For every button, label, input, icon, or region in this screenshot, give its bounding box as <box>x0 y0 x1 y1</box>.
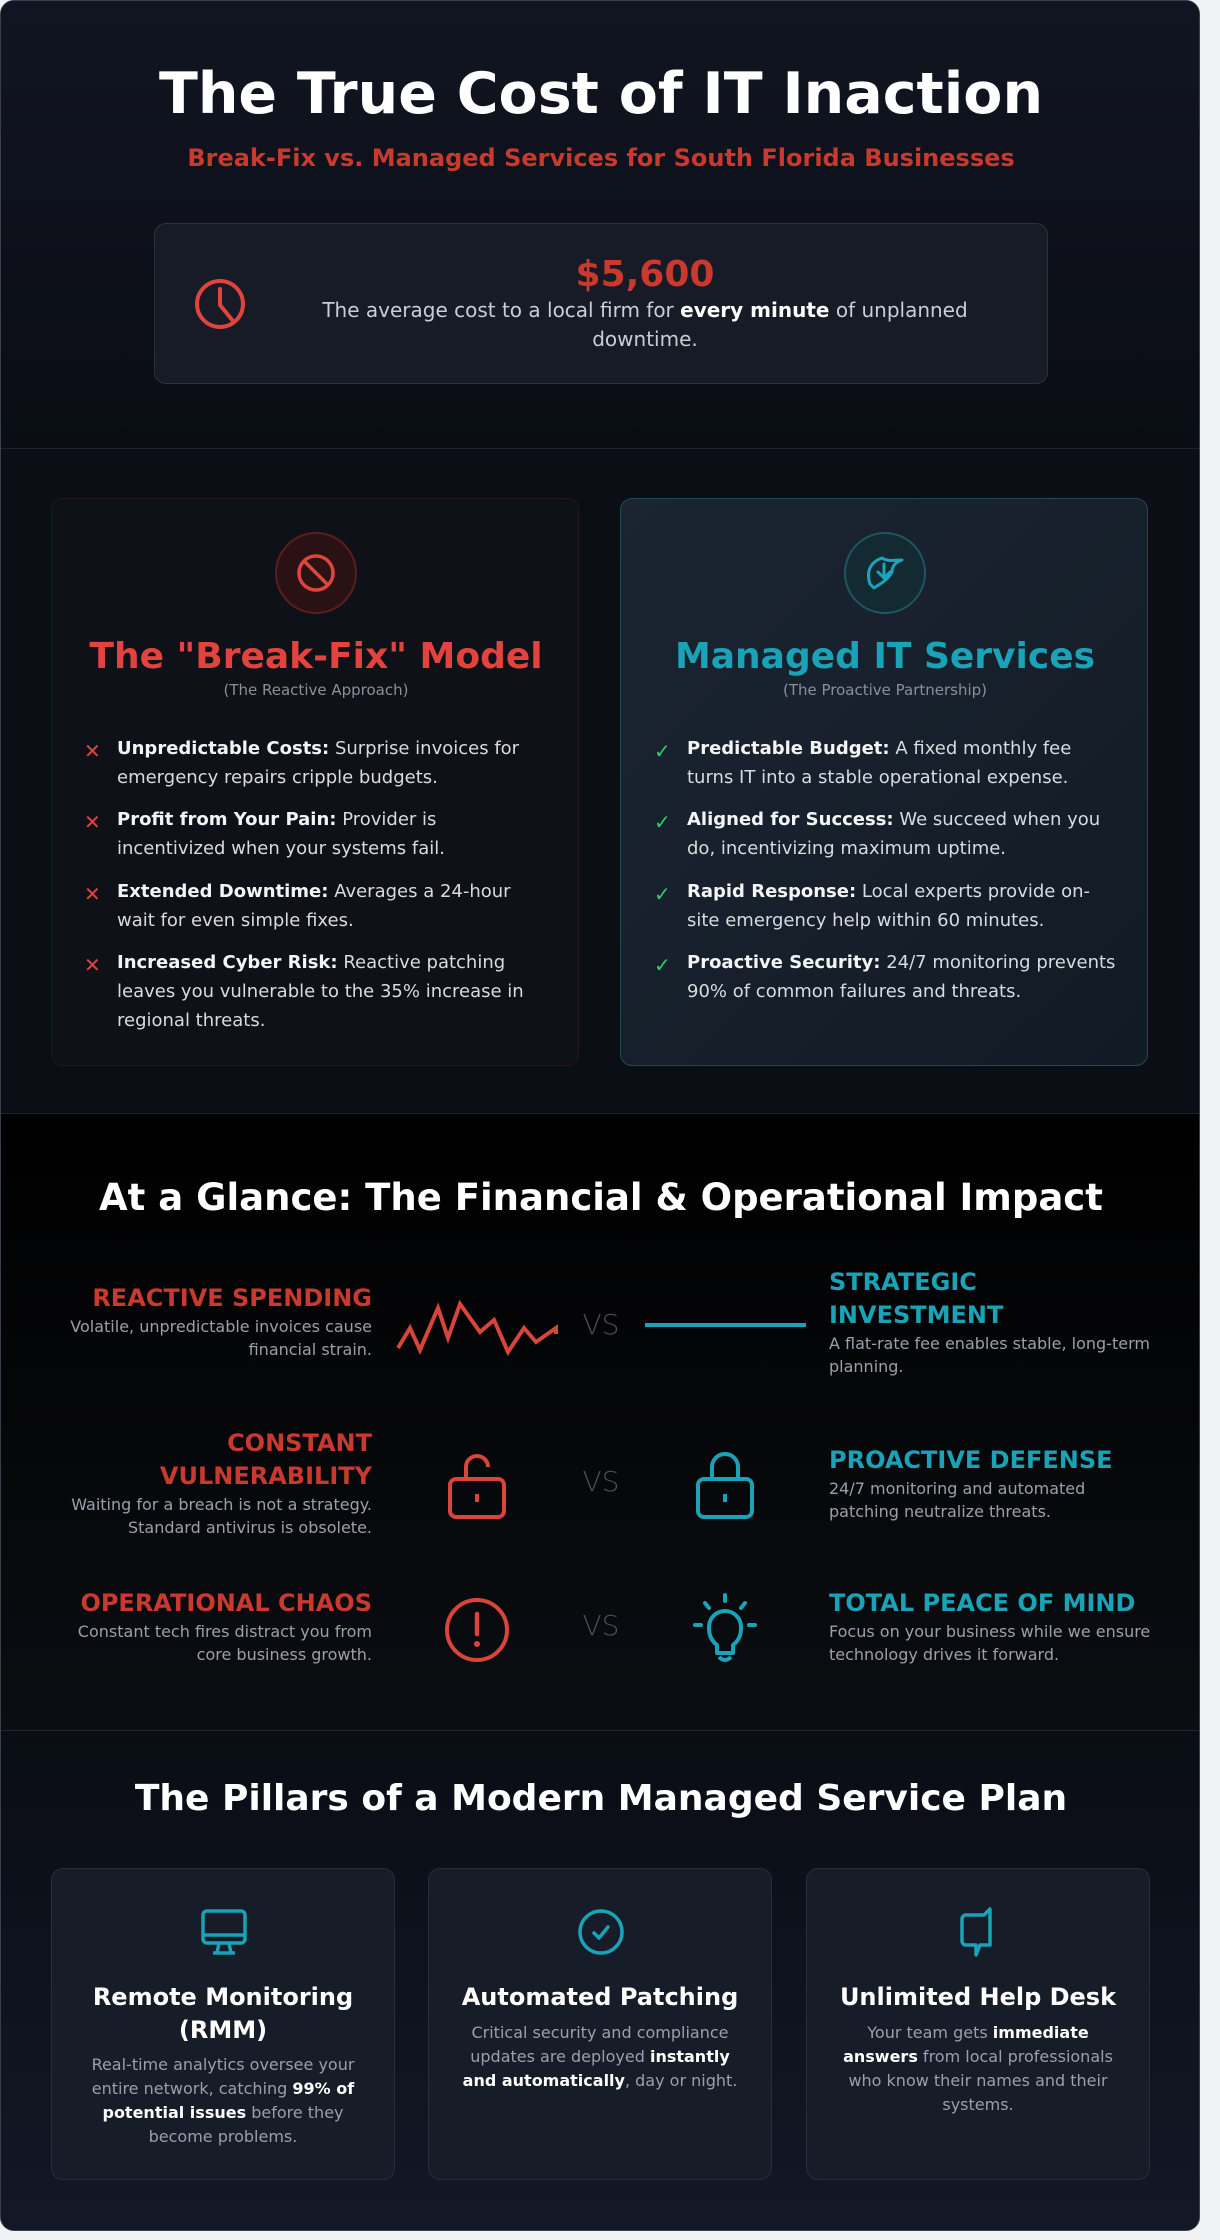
list: managed benefits <box>654 738 1115 1002</box>
icon: check circle <box>578 1909 624 1955</box>
title: Automated Patching <box>462 1983 738 2011</box>
panel: break-fix: ✕ <box>84 882 101 906</box>
text: Your team gets immediate answers from local professionals who know their names and their systems. <box>843 2023 1113 2114</box>
right text: Focus on your business while we ensure technology drives it forward. <box>829 1622 1150 1664</box>
section: pillars <box>1 1731 1201 2232</box>
panel: managed IT: ✓ <box>654 739 671 763</box>
list: break-fix drawbacks: Increased Cyber Risk: Reactive patching leaves you vulnerable to the 35% increase in regional threats. <box>117 952 524 1031</box>
text: Real-time analytics oversee your entire network, catching 99% of potential issues before they become problems. <box>92 2055 354 2146</box>
row: vulnerability <box>71 1429 1113 1537</box>
right text: A flat-rate fee enables stable, long-term planning. <box>829 1334 1150 1376</box>
right text: STRATEGIC <box>829 1268 977 1296</box>
list: managed benefits: Predictable Budget: A fixed monthly fee turns IT into a stable operational expense. <box>687 738 1071 788</box>
left text: REACTIVE SPENDING <box>92 1284 372 1312</box>
panel: break-fix: ✕ <box>84 953 101 977</box>
panel: break-fix: ✕ <box>84 739 101 763</box>
section: header <box>1 1 1201 449</box>
left text: OPERATIONAL CHAOS <box>80 1589 372 1617</box>
list: break-fix drawbacks: Extended Downtime: Averages a 24-hour wait for even simple fixes. <box>117 881 511 931</box>
row: chaos <box>78 1589 1150 1664</box>
icon: lightbulb <box>693 1593 757 1662</box>
heading: At a Glance: The Financial & Operational Impact <box>99 1176 1103 1219</box>
icon: zigzag <box>396 1300 558 1356</box>
heading: The "Break-Fix" Model <box>89 636 543 677</box>
icon: clock <box>195 279 245 329</box>
subheading: (The Reactive Approach) <box>224 681 408 699</box>
vs: VS <box>583 1609 619 1642</box>
heading: The Pillars of a Modern Managed Service Plan <box>135 1778 1067 1819</box>
card: help desk <box>806 1868 1150 2180</box>
vs: VS <box>583 1308 619 1341</box>
panel: managed IT: ✓ <box>654 810 671 834</box>
section: at a glance <box>1 1114 1201 1731</box>
panel: break-fix: ✕ <box>84 810 101 834</box>
icon: chat <box>960 1907 992 1957</box>
title: The True Cost of IT Inaction <box>159 61 1043 127</box>
card: automated patching <box>428 1868 772 2180</box>
left text: Constant tech fires distract you from core business growth. <box>78 1622 372 1664</box>
left text: VULNERABILITY <box>160 1462 372 1490</box>
title: (RMM) <box>179 2016 267 2044</box>
right text: INVESTMENT <box>829 1301 1003 1329</box>
left text: Volatile, unpredictable invoices cause financial strain. <box>70 1317 372 1359</box>
left text <box>70 1284 372 1359</box>
row: spending <box>70 1268 1150 1376</box>
title <box>93 1983 353 2044</box>
list: break-fix drawbacks <box>84 738 524 1031</box>
right text <box>829 1268 1150 1376</box>
icon: locked <box>696 1452 754 1519</box>
list: break-fix drawbacks: Unpredictable Costs: Surprise invoices for emergency repairs cripple budgets. <box>117 738 519 788</box>
section: comparison <box>1 449 1201 1114</box>
right text: TOTAL PEACE OF MIND <box>829 1589 1135 1617</box>
panel: managed IT <box>620 498 1148 1066</box>
left text <box>71 1429 372 1537</box>
right text: 24/7 monitoring and automated patching neutralize threats. <box>829 1479 1085 1521</box>
icon: shield leaf <box>844 532 926 614</box>
icon: flat line <box>645 1323 806 1327</box>
text: Critical security and compliance updates are deployed instantly and automatically, day or night. <box>463 2023 737 2090</box>
stat text: The average cost to a local firm for every minute of unplanned downtime. <box>322 298 968 351</box>
subtitle: Break-Fix vs. Managed Services for South Florida Businesses <box>187 144 1015 172</box>
stat callout <box>154 223 1048 384</box>
panel: break-fix <box>51 498 579 1066</box>
list: managed benefits: Rapid Response: Local experts provide on-site emergency help within 60 minutes. <box>687 881 1090 931</box>
right text <box>829 1589 1150 1664</box>
list: managed benefits: Proactive Security: 24/7 monitoring prevents 90% of common failures and threats. <box>687 952 1115 1002</box>
vs: VS <box>583 1465 619 1498</box>
right text: PROACTIVE DEFENSE <box>829 1446 1113 1474</box>
left text: Waiting for a breach is not a strategy. Standard antivirus is obsolete. <box>71 1495 372 1537</box>
icon: unlocked <box>448 1454 506 1519</box>
card: remote monitoring <box>51 1868 395 2180</box>
icon: alert <box>445 1598 509 1662</box>
left text: CONSTANT <box>227 1429 372 1457</box>
list: managed benefits: Aligned for Success: We succeed when you do, incentivizing maximum uptime. <box>687 809 1100 859</box>
title: Remote Monitoring <box>93 1983 353 2011</box>
panel: managed IT: ✓ <box>654 882 671 906</box>
panel: managed IT: ✓ <box>654 953 671 977</box>
left text <box>78 1589 372 1664</box>
icon: prohibited <box>275 532 357 614</box>
list: break-fix drawbacks: Profit from Your Pain: Provider is incentivized when your systems fail. <box>117 809 445 859</box>
heading: Managed IT Services <box>675 636 1095 677</box>
right text <box>829 1446 1113 1521</box>
title: Unlimited Help Desk <box>840 1983 1116 2011</box>
subheading: (The Proactive Partnership) <box>783 681 987 699</box>
stat number: $5,600 <box>576 254 714 295</box>
icon: monitor <box>201 1909 247 1955</box>
